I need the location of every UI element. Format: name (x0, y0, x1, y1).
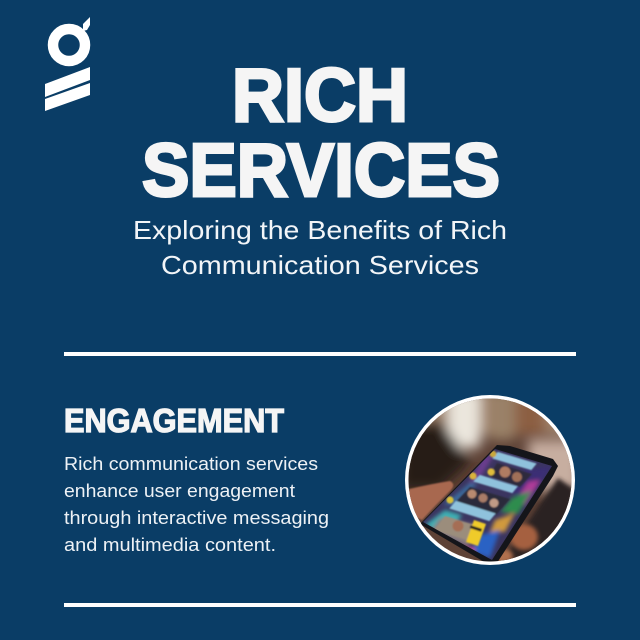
title (142, 53, 500, 212)
text block: engagement description: enhance user engagement (64, 481, 295, 501)
chat photo 3 (435, 516, 473, 540)
subtitle: Communication Services (161, 250, 479, 280)
chat photo 2 (455, 487, 510, 515)
photo: hand holding phone in circular frame (400, 390, 580, 566)
phone screen (423, 449, 552, 560)
dark area below the phone (503, 476, 572, 560)
yellow character (466, 520, 486, 546)
subtitle (133, 215, 507, 280)
hand thumb (405, 481, 453, 520)
text block: engagement description (64, 454, 329, 555)
background finger behind phone (493, 524, 538, 563)
chat photo 1 (489, 463, 532, 487)
phone body (420, 445, 558, 563)
subtitle: Exploring the Benefits of Rich (133, 215, 507, 245)
chat bubbles (494, 453, 535, 469)
heading: engagement: ENGAGEMENT (64, 402, 284, 439)
emoji (487, 468, 495, 476)
title: SERVICES (142, 128, 500, 212)
logo (45, 17, 90, 111)
text block: engagement description: Rich communication services (64, 454, 318, 474)
text block: engagement description: and multimedia content. (64, 535, 276, 555)
text block: engagement description: through interactive messaging (64, 508, 329, 528)
title: RICH (232, 53, 408, 137)
